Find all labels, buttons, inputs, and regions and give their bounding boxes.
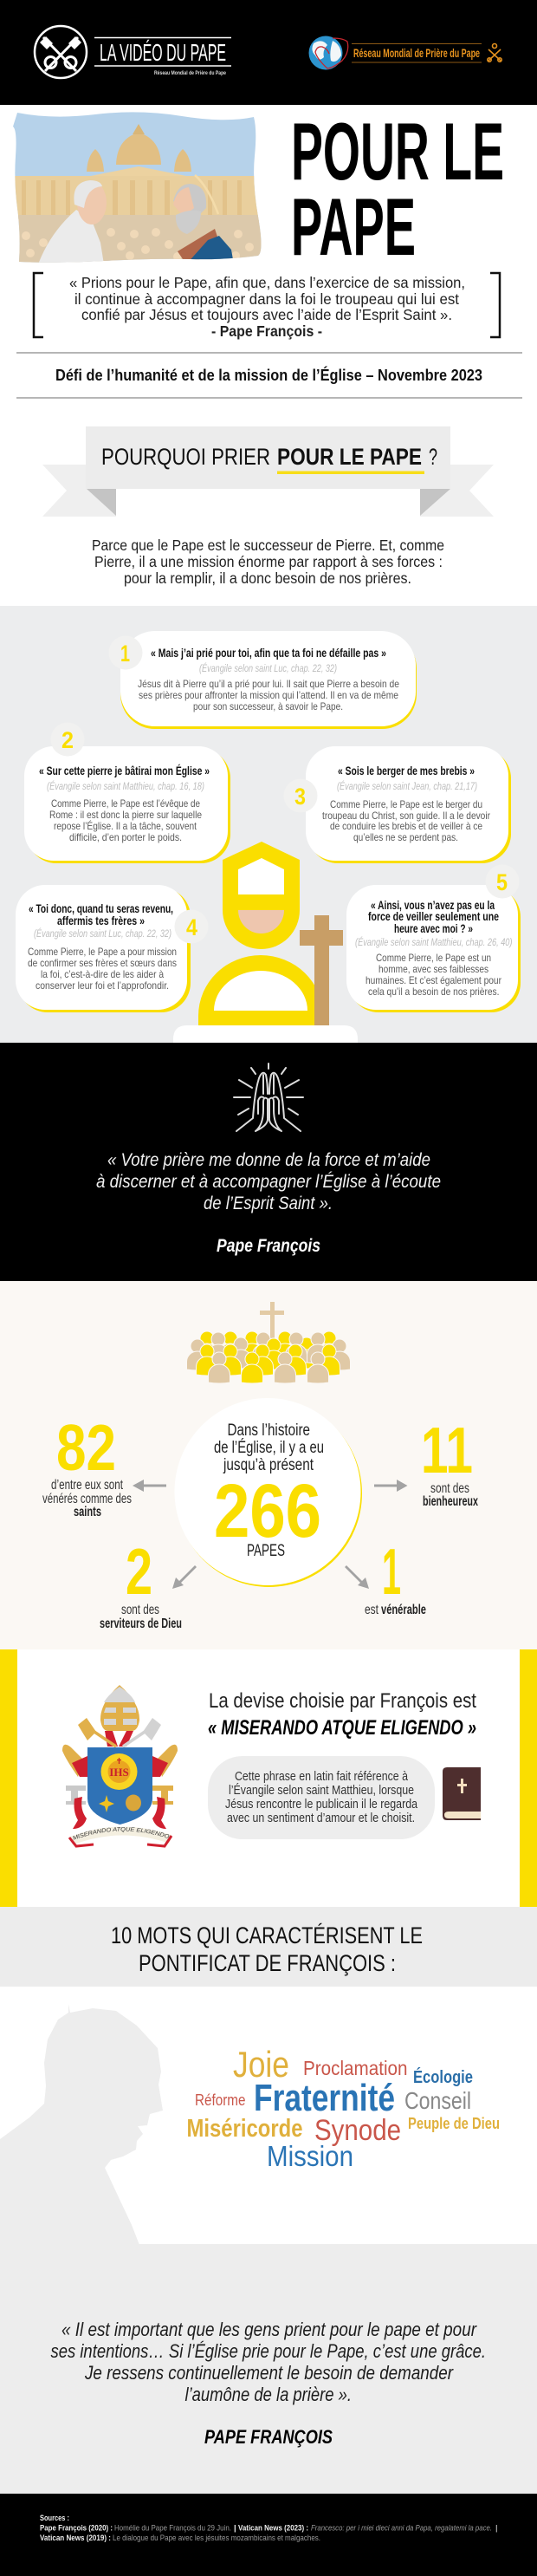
- subtitle: challenge and date: Défi de l’humanité et de la mission de l’Église – Novembre 2023: [55, 366, 482, 384]
- heading banner: pourquoi prier pour le pape: POURQUOI PRIER: [101, 444, 270, 470]
- card 1: pour son successeur, à savoir le Pape.: [193, 700, 343, 712]
- card 3: (Évangile selon saint Jean, chap. 21,17): [337, 781, 477, 792]
- statistic: 11 bienheureux: 11: [421, 1414, 473, 1486]
- statistic: 1 vénérable: vénérable: [381, 1603, 426, 1617]
- card 5: force de veiller seulement une: [368, 910, 499, 923]
- text block: intention quote in brackets: il continue à accompagner dans la foi le troupeau qui lui est: [74, 290, 459, 308]
- card 2: (Évangile selon saint Matthieu, chap. 16, 18): [47, 781, 204, 792]
- coat of arms of Pope Francis: MISERANDO ATQUE ELIGENDO: [73, 1827, 170, 1840]
- card 1: « Mais j’ai prié pour toi, afin que ta foi ne défaille pas »: [151, 647, 386, 660]
- word cloud: Fraternité: [254, 2077, 395, 2119]
- statistic: 1 vénérable: est: [365, 1603, 379, 1617]
- quote text: à discerner et à accompagner l’Église à l’écoute: [96, 1172, 441, 1192]
- central circle: 266 papes: 266: [214, 1469, 321, 1553]
- logo text: La Vidéo du Pape: Réseau Mondial de Prière du Pape: [154, 70, 226, 76]
- word cloud: Synode: [314, 2114, 401, 2147]
- quote text: [96, 1150, 441, 1213]
- title: PAPE: [291, 181, 416, 272]
- word cloud: Proclamation: [303, 2057, 407, 2079]
- card 3: [284, 746, 511, 863]
- motto explanation pill: Cette phrase en latin fait référence à: [235, 1770, 409, 1784]
- heading banner: pourquoi prier pour le pape: POUR LE PAPE: [277, 444, 422, 470]
- quote text: « Votre prière me donne de la force et m’aide: [107, 1150, 430, 1170]
- card 1: Jésus dit à Pierre qu’il a prié pour lui. Il sait que Pierre a besoin de: [138, 678, 399, 690]
- coat of arms of Pope Francis: IHS: [109, 1766, 129, 1779]
- icon: praying hands: [234, 1064, 303, 1131]
- motto explanation pill: Jésus rencontre le publicain il le regarda: [225, 1798, 418, 1812]
- text block: introduction: [92, 537, 444, 587]
- statistic: 2 serviteurs de Dieu: [100, 1535, 182, 1631]
- card 4: « Toi donc, quand tu seras revenu,: [29, 902, 173, 915]
- card 2: « Sur cette pierre je bâtirai mon Église »: [39, 764, 210, 777]
- card 3: 3: [294, 784, 306, 810]
- central circle: 266 papes: de l’Église, il y a eu: [214, 1439, 324, 1457]
- arrows: [133, 1480, 407, 1589]
- card 5: Comme Pierre, le Pape est un: [376, 952, 491, 964]
- card 3: qu’elles ne se perdent pas.: [353, 831, 458, 843]
- card 4: Comme Pierre, le Pape a pour mission: [28, 946, 177, 958]
- closing quote text: [50, 2319, 486, 2405]
- motto heading: [208, 1689, 476, 1740]
- card 2: 2: [61, 727, 74, 753]
- card 4: la foi, c’est-à-dire de les aider à: [41, 968, 164, 980]
- central circle: 266 papes: Dans l’histoire: [227, 1421, 310, 1440]
- panel: five reasons: [0, 606, 537, 1043]
- text block: intention quote in brackets: confié par Jésus et toujours avec l’aide de l’Esprit Saint ».: [81, 306, 452, 323]
- panel: word cloud: [0, 2004, 500, 2245]
- subtitle: challenge and date: [16, 353, 522, 398]
- text block: introduction: Parce que le Pape est le successeur de Pierre. Et, comme: [92, 537, 444, 554]
- closing quote text: Je ressens continuellement le besoin de demander: [84, 2362, 454, 2384]
- illustration: the Pope and Saint Peter in front of the basilica: [9, 108, 264, 264]
- card 5: humaines. Et c’est également pour: [366, 974, 501, 986]
- card 4: [16, 885, 208, 1012]
- word cloud: Mission: [267, 2140, 353, 2172]
- text block: intention quote in brackets: - Pape François -: [211, 322, 322, 340]
- central circle: 266 papes: [175, 1398, 362, 1587]
- panel: motto: [0, 1649, 537, 1907]
- statistic: 2 serviteurs de Dieu: 2: [126, 1535, 152, 1608]
- statistic: 1 vénérable: 1: [382, 1535, 401, 1608]
- heading: ten words: [0, 1907, 537, 1987]
- heading banner: pourquoi prier pour le pape: [42, 426, 494, 517]
- panel: black quote: [0, 1043, 537, 1281]
- card 1: (Évangile selon saint Luc, chap. 22, 32): [199, 663, 337, 674]
- word cloud: Peuple de Dieu: [408, 2115, 500, 2132]
- statistic: 11 bienheureux: sont des: [430, 1481, 469, 1496]
- illustration: pope figure with cross: [173, 842, 358, 1043]
- card 3: troupeau du Christ, son guide. Il a le devoir: [322, 810, 490, 822]
- card 1: [109, 631, 417, 729]
- panel: sources footer: |: [495, 2524, 497, 2533]
- motto explanation pill: l’Évangile selon saint Matthieu, lorsque: [229, 1783, 414, 1798]
- panel: popes statistics: [0, 1281, 537, 1649]
- word cloud: Réforme: [195, 2091, 246, 2109]
- icon: crowd of people: [187, 1331, 350, 1383]
- card 5: « Ainsi, vous n’avez pas eu la: [371, 899, 495, 912]
- panel: closing quote: [0, 2244, 537, 2494]
- statistic: 1 vénérable: [365, 1535, 426, 1617]
- text block: introduction: Pierre, il a une mission énorme par rapport à ses forces :: [94, 553, 443, 570]
- text block: introduction: pour la remplir, il a donc besoin de nos prières.: [124, 569, 411, 587]
- text block: intention quote in brackets: [34, 273, 500, 340]
- central circle: 266 papes: PAPES: [247, 1542, 285, 1560]
- card 1: 1: [120, 641, 130, 667]
- word cloud: Joie: [233, 2044, 289, 2085]
- panel: sources footer: Vatican News (2023) :: [238, 2524, 308, 2533]
- panel: header: [0, 0, 537, 105]
- card 4: (Évangile selon saint Luc, chap. 22, 32): [34, 928, 171, 940]
- panel: sources footer: Sources :: [40, 2514, 69, 2523]
- motto explanation pill: avec un sentiment d’amour et le choisit.: [227, 1812, 415, 1825]
- heading: ten words: 10 MOTS QUI CARACTÉRISENT LE: [111, 1922, 423, 1948]
- statistic: 82 saints: 82: [56, 1411, 116, 1484]
- heading: ten words: PONTIFICAT DE FRANÇOIS :: [139, 1950, 396, 1976]
- card 4: affermis tes frères »: [57, 914, 145, 927]
- card 3: de conduire les brebis et de veiller à ce: [330, 820, 482, 832]
- statistic: 11 bienheureux: bienheureux: [423, 1494, 478, 1509]
- logo text: La Vidéo du Pape: LA VIDÉO DU PAPE: [100, 39, 226, 66]
- closing quote text: l’aumône de la prière ».: [185, 2384, 352, 2405]
- statistic: 82 saints: saints: [74, 1505, 101, 1519]
- panel: sources footer: Le dialogue du Pape avec les jésuites mozambicains et malgaches.: [113, 2534, 320, 2543]
- card 3: Comme Pierre, le Pape est le berger du: [330, 798, 482, 810]
- card 1: ses prières pour affronter la mission qui l’attend. Il en va de même: [139, 689, 398, 701]
- title: [291, 106, 504, 272]
- card 5: 5: [496, 869, 508, 895]
- card 2: difficile, d’en porter le poids.: [69, 831, 182, 843]
- quote attribution: Pape François: [217, 1236, 320, 1256]
- coat of arms of Pope Francis: [62, 1685, 178, 1848]
- card 2: Comme Pierre, le Pape est l’évêque de: [51, 797, 200, 810]
- logo text: Réseau Mondial de Prière du Pape: [352, 43, 482, 62]
- panel: sources footer: |: [234, 2524, 236, 2533]
- statistic: 2 serviteurs de Dieu: sont des: [121, 1603, 159, 1617]
- panel: sources footer: [0, 2494, 537, 2576]
- word cloud: Écologie: [413, 2067, 473, 2087]
- motto heading: La devise choisie par François est: [209, 1689, 476, 1713]
- card 4: 4: [186, 914, 197, 940]
- card 2: Rome : il est donc la pierre sur laquelle: [49, 809, 202, 821]
- panel: sources footer: Francesco: per i miei dieci anni da Papa, regalatemi la pace.: [311, 2524, 492, 2533]
- card 3: « Sois le berger de mes brebis »: [338, 764, 475, 777]
- heading banner: pourquoi prier pour le pape: ?: [429, 444, 437, 470]
- logo text: La Vidéo du Pape: [94, 38, 231, 76]
- icon: orange keys: [488, 43, 501, 62]
- text block: intention quote in brackets: « Prions pour le Pape, afin que, dans l’exercice de sa mission,: [69, 274, 465, 291]
- motto explanation pill: [208, 1756, 435, 1839]
- card 5: [346, 865, 521, 1012]
- closing attribution: PAPE FRANÇOIS: [204, 2426, 333, 2448]
- word cloud: Conseil: [404, 2087, 471, 2114]
- card 5: heure avec moi ? »: [394, 922, 473, 935]
- card 2: repose l’Église. Il a la tâche, souvent: [54, 819, 197, 832]
- central circle: 266 papes: jusqu’à présent: [223, 1456, 314, 1474]
- quote text: de l’Esprit Saint ».: [204, 1194, 333, 1213]
- panel: sources footer: Vatican News (2019) :: [40, 2534, 111, 2543]
- word cloud: [187, 2044, 500, 2172]
- statistic: 82 saints: [42, 1411, 132, 1519]
- statistic: 11 bienheureux: [421, 1414, 478, 1509]
- card 5: cela qu’il a besoin de nos prières.: [368, 986, 499, 998]
- statistic: 82 saints: d’entre eux sont: [51, 1478, 124, 1493]
- statistic: 82 saints: vénérés comme des: [42, 1492, 132, 1506]
- card 4: de confirmer ses frères et sœurs dans: [28, 957, 177, 969]
- word cloud: Miséricorde: [187, 2115, 303, 2143]
- card 4: conserver leur foi et l’approfondir.: [36, 979, 169, 992]
- card 5: homme, avec ses faiblesses: [378, 963, 488, 975]
- panel: sources footer: Pape François (2020) :: [40, 2524, 113, 2533]
- logo: globe with heart: [308, 36, 348, 69]
- logo: La Vidéo du Pape keys: [35, 26, 87, 78]
- statistic: 2 serviteurs de Dieu: serviteurs de Dieu: [100, 1617, 182, 1631]
- icon: cross above crowd: [260, 1302, 284, 1338]
- card 2: [24, 723, 230, 863]
- silhouette of Pope Francis: [0, 2004, 163, 2245]
- icon: bible: [443, 1767, 481, 1820]
- panel: sources footer: Homélie du Pape François du 29 Juin.: [114, 2524, 231, 2533]
